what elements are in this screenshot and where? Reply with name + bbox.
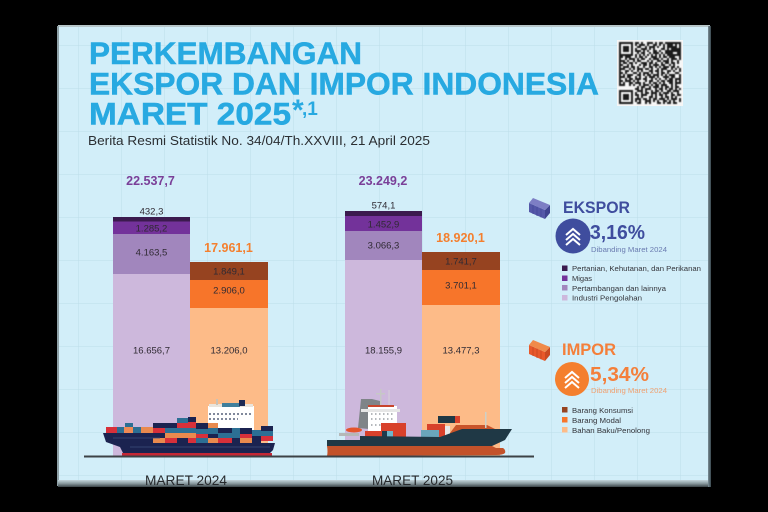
legend: ekspor <box>562 264 701 302</box>
QR code <box>617 40 683 106</box>
bar totals: 17.961,1 <box>204 241 253 255</box>
legend: ekspor: Pertambangan dan lainnya <box>572 284 667 293</box>
panel: background <box>57 25 710 486</box>
bar value labels: 18.155,9 <box>365 346 402 356</box>
bar totals: 23.249,2 <box>359 174 407 188</box>
icon: ekspor container <box>529 198 550 219</box>
bar value labels: 13.477,3 <box>443 346 479 356</box>
bar totals: 22.537,7 <box>126 174 175 188</box>
bar totals: 18.920,1 <box>436 231 485 245</box>
bar chart: Maret 2024 impor <box>190 262 268 456</box>
heading: ekspor: EKSPOR <box>563 199 630 217</box>
axis label: Maret 2025: MARET 2025 <box>372 472 453 488</box>
bar value labels: 3.701,1 <box>445 280 477 292</box>
legend: impor: Barang Konsumsi <box>572 406 633 415</box>
bar totals <box>126 174 485 255</box>
stat note: ekspor: Dibanding Maret 2024 <box>591 245 667 254</box>
bar value labels <box>133 200 479 356</box>
title: MARET 2025 <box>89 96 291 132</box>
icon: ship 2025 <box>327 389 512 456</box>
title: PERKEMBANGAN <box>89 35 362 71</box>
legend: impor <box>562 406 650 435</box>
icon: impor container <box>529 340 550 361</box>
axis label: Maret 2024: MARET 2024 <box>145 472 227 488</box>
bar value labels: 574,1 <box>372 200 395 212</box>
bar value labels: 4.163,5 <box>136 248 167 258</box>
bar value labels: 16.656,7 <box>133 346 170 356</box>
panel edge: right band <box>708 26 711 487</box>
heading: impor: IMPOR <box>562 341 616 359</box>
ground line <box>84 456 534 458</box>
bar value labels: 432,3 <box>140 206 163 218</box>
title <box>89 35 599 132</box>
title: * <box>292 94 304 127</box>
icon: impor up arrows <box>555 362 589 396</box>
icon: ship 2024 <box>103 399 275 456</box>
bar value labels: 2.906,0 <box>213 286 245 296</box>
legend: ekspor: Industri Pengolahan <box>572 294 642 302</box>
title: EKSPOR DAN IMPOR INDONESIA <box>89 66 599 102</box>
legend: ekspor: Pertanian, Kehutanan, dan Perikanan <box>572 264 701 273</box>
subtitle: Berita Resmi Statistik No. 34/04/Th.XXVIII, 21 April 2025 <box>88 133 430 148</box>
stat: impor: 5,34% <box>590 364 649 386</box>
bar value labels: 1.849,1 <box>213 266 245 278</box>
legend: impor: Bahan Baku/Penolong <box>572 426 650 435</box>
bar value labels: 1.741,7 <box>445 256 477 268</box>
bar value labels: 13.206,0 <box>211 346 247 356</box>
legend: ekspor: Migas <box>572 274 592 283</box>
title: ,1 <box>302 99 318 120</box>
icon: ekspor up arrows <box>556 218 590 254</box>
bar value labels: 1.452,9 <box>368 220 399 230</box>
bar value labels: 3.066,3 <box>368 240 399 252</box>
legend: impor: Barang Modal <box>572 416 621 425</box>
bar chart: Maret 2025 impor <box>422 252 500 456</box>
stat: ekspor: 3,16% <box>590 222 645 244</box>
bar chart: Maret 2024 ekspor <box>113 217 190 456</box>
stat note: impor: Dibanding Maret 2024 <box>591 386 667 395</box>
bar chart: Maret 2025 ekspor <box>345 211 422 456</box>
panel edge: bottom band <box>58 480 710 487</box>
bar value labels: 1.285,2 <box>136 224 167 234</box>
